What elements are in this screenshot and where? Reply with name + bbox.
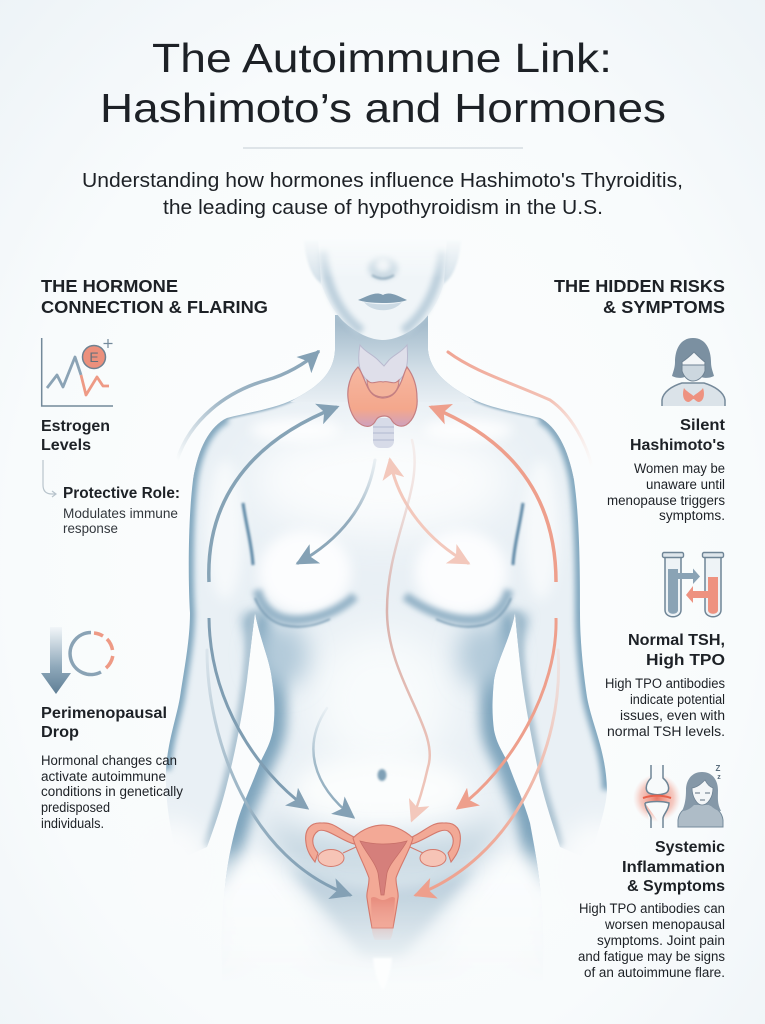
pale highlights <box>252 425 512 535</box>
perimenopausal description <box>41 753 183 831</box>
uterine body <box>353 825 413 928</box>
arm outer contour <box>166 418 227 770</box>
systemic inflammation label: Inflammation <box>622 859 725 876</box>
silent hashimoto's label <box>630 417 726 454</box>
face <box>306 247 459 340</box>
icon: downward arrow and broken circle <box>41 627 113 694</box>
nose <box>368 257 398 279</box>
systemic inflammation description: of an autoimmune flare. <box>584 965 725 980</box>
neck <box>290 315 475 402</box>
icon: tired woman: z <box>717 774 721 781</box>
icon: tired woman <box>678 764 723 827</box>
normal tsh label: High TPO <box>646 652 725 669</box>
silent hashimoto's label: Silent <box>680 417 726 434</box>
icon: woman with thyroid <box>662 338 725 406</box>
perimenopausal description: conditions in genetically <box>41 784 183 799</box>
protective role: response <box>63 521 118 536</box>
ears <box>306 247 321 284</box>
arrow: salmon double-headed <box>390 460 468 563</box>
arrow: blue navel curve <box>313 708 353 817</box>
normal tsh label <box>628 632 725 669</box>
ovaries <box>318 847 446 866</box>
silent hashimoto's description <box>607 461 725 523</box>
arrow: salmon upper to thyroid <box>431 407 556 582</box>
cavity <box>360 841 407 895</box>
uterus <box>306 823 460 940</box>
arrow: outer salmon line <box>448 352 592 467</box>
fallopian tube right <box>410 823 460 862</box>
silent hashimoto's description: unaware until <box>646 477 725 492</box>
arrow: salmon down to abdomen <box>458 618 556 808</box>
normal tsh description: issues, even with <box>620 708 725 723</box>
thyroid cartilage <box>359 345 408 386</box>
below-breast side shading <box>256 623 308 687</box>
panel: hidden risks <box>554 276 726 980</box>
trachea <box>373 418 394 448</box>
icon: inflamed joint <box>633 765 681 828</box>
silent hashimoto's description: menopause triggers <box>607 493 725 508</box>
protective role <box>63 485 180 536</box>
subtitle: Understanding how hormones influence Hashimoto's Thyroiditis, <box>82 169 683 192</box>
panel: hormone connection <box>41 276 268 831</box>
systemic inflammation label: & Symptoms <box>627 878 725 895</box>
icon: test tubes <box>662 552 724 617</box>
normal tsh description: High TPO antibodies <box>605 676 725 691</box>
normal tsh description: indicate potential <box>630 692 725 707</box>
perimenopausal description: individuals. <box>41 816 104 831</box>
normal tsh description <box>605 676 725 739</box>
estrogen levels label <box>41 418 110 454</box>
body illustration <box>166 247 607 960</box>
normal tsh label: Normal TSH, <box>628 632 725 649</box>
perimenopausal drop label <box>41 705 167 741</box>
cervix and canal <box>371 897 395 940</box>
estrogen levels label: Estrogen <box>41 418 110 435</box>
thyroid gland <box>348 367 417 426</box>
subtitle <box>82 169 683 219</box>
torso and arms silhouette <box>166 350 607 960</box>
under-breast crescents <box>257 590 355 620</box>
heading <box>554 276 725 317</box>
systemic inflammation label: Systemic <box>655 839 725 856</box>
arrow: outer blue to neck <box>177 352 318 460</box>
shoulder edge lines <box>193 350 335 480</box>
silent hashimoto's label: Hashimoto's <box>630 437 725 454</box>
title <box>100 35 666 131</box>
heading: THE HORMONE <box>41 276 178 296</box>
heading: CONNECTION & FLARING <box>41 297 268 317</box>
fallopian tube left <box>306 823 356 862</box>
perimenopausal drop label: Perimenopausal <box>41 705 167 722</box>
title: The Autoimmune Link: <box>152 35 612 81</box>
systemic inflammation label <box>622 839 725 895</box>
navel <box>378 769 386 781</box>
perimenopausal description: activate autoimmune <box>41 769 166 784</box>
systemic inflammation description: and fatigue may be signs <box>578 949 725 964</box>
systemic inflammation description: worsen menopausal <box>604 917 725 932</box>
protective role: Modulates immune <box>63 506 178 521</box>
silent hashimoto's description: symptoms. <box>659 508 725 523</box>
heading: THE HIDDEN RISKS <box>554 276 725 296</box>
silent hashimoto's description: Women may be <box>634 461 725 476</box>
perimenopausal drop label: Drop <box>41 724 79 741</box>
arrow: long central salmon <box>387 440 430 820</box>
systemic inflammation description: High TPO antibodies can <box>579 901 725 916</box>
perimenopausal description: Hormonal changes can <box>41 753 177 768</box>
waist contour <box>225 613 274 887</box>
arrow: blue upper to thyroid <box>209 407 337 582</box>
fade lower arms <box>132 820 212 920</box>
arrow: salmon lower to uterus <box>416 650 559 895</box>
arrow: blue lower to uterus <box>207 650 350 895</box>
title: Hashimoto’s and Hormones <box>100 85 666 131</box>
protective role: Protective Role: <box>63 485 180 502</box>
arrows <box>177 352 592 895</box>
systemic inflammation description: symptoms. Joint pain <box>597 933 725 948</box>
armpit shading <box>243 503 253 565</box>
heading <box>41 276 268 317</box>
thigh highlights <box>224 839 298 921</box>
heading: & SYMPTOMS <box>603 297 725 317</box>
inner arm contour <box>207 613 560 847</box>
systemic inflammation description <box>578 901 725 980</box>
lips <box>358 294 407 310</box>
icon: tired woman: Z <box>716 764 721 773</box>
connector arrow <box>43 460 56 497</box>
arrow: blue down to abdomen <box>209 618 307 808</box>
pelvic V shading <box>266 818 500 898</box>
subtitle: the leading cause of hypothyroidism in the U.S. <box>163 196 603 219</box>
estrogen levels label: Levels <box>41 437 91 454</box>
crotch gap <box>373 958 392 990</box>
arrow: blue thyroid to breast <box>298 460 375 563</box>
breasts <box>259 530 351 614</box>
icon: estrogen chart <box>42 338 113 406</box>
perimenopausal description: predisposed <box>41 800 110 815</box>
icon: estrogen chart: E <box>89 349 99 365</box>
normal tsh description: normal TSH levels. <box>607 724 725 739</box>
